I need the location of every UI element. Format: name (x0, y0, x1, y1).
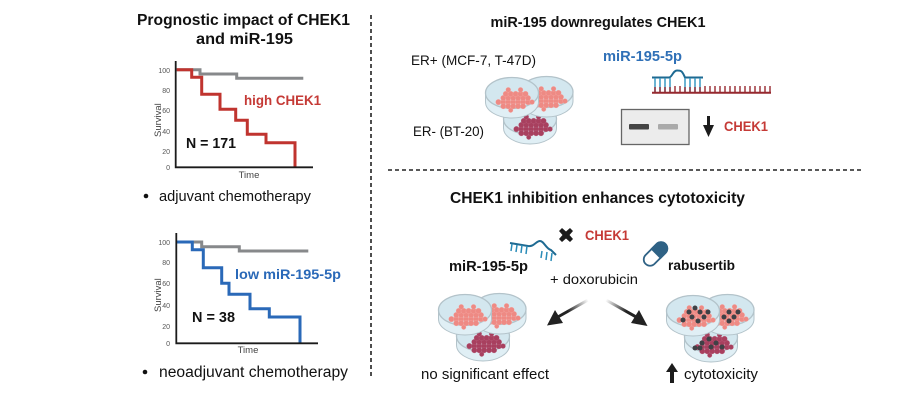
icon: miRNA strand (510, 241, 556, 261)
axis tick labels: 40 (162, 129, 170, 136)
icon: petri dishes (486, 76, 573, 144)
survival chart: low miR-195-5p (153, 233, 341, 356)
label: miR-195-5p: miR-195-5p (603, 49, 682, 65)
divider: horizontal (388, 169, 862, 171)
label: cytotoxicity: cytotoxicity (684, 367, 759, 383)
label: high CHEK1: high CHEK1 (244, 92, 321, 108)
axis tick labels: 100 (158, 240, 170, 247)
grey survival curve (177, 242, 308, 251)
icon: arrow to right (606, 300, 648, 326)
y axis label: Survival (153, 103, 164, 137)
label: miR-195-5p: miR-195-5p (449, 259, 528, 275)
icon: treated petri dishes (666, 294, 754, 362)
axis tick labels: 80 (162, 88, 170, 95)
label: rabusertib: rabusertib (668, 257, 735, 273)
heading: prognostic impact: Prognostic impact of CHEK1 (137, 12, 350, 29)
icon: capsule (641, 238, 671, 269)
red survival curve (177, 70, 295, 167)
label: + doxorubicin: + doxorubicin (550, 271, 638, 287)
axes (176, 61, 313, 167)
axis tick labels: 0 (166, 165, 170, 172)
heading: inhibition: CHEK1 inhibition enhances cytotoxicity (450, 190, 745, 207)
icon: up arrow (666, 363, 678, 383)
panel: miR-195 downregulates CHEK1 (411, 14, 771, 144)
icon: western blot (622, 110, 689, 144)
axis tick labels: 0 (166, 341, 170, 348)
label: ER+: ER+ (MCF-7, T-47D) (411, 52, 536, 68)
icon: cross (559, 228, 573, 242)
axis tick labels: 20 (162, 324, 170, 331)
heading: downregulates: miR-195 downregulates CHEK1 (490, 14, 706, 31)
icon: untreated petri dishes (438, 294, 526, 361)
survival chart: high CHEK1 (153, 61, 321, 181)
y axis label: Survival (153, 278, 164, 312)
label: no significant effect: no significant effect (421, 367, 549, 383)
icon: miRNA bound to mRNA (652, 70, 771, 93)
heading: prognostic impact (137, 12, 350, 48)
axis tick labels: 60 (162, 281, 170, 288)
label: CHEK1: CHEK1 (585, 228, 629, 243)
grey survival curve (177, 70, 303, 78)
label: N = 38: N = 38 (192, 310, 235, 326)
icon: down arrow (703, 116, 714, 137)
x axis label: Time (239, 170, 259, 181)
axis tick labels (158, 240, 170, 348)
axis tick labels: 20 (162, 149, 170, 156)
bullet: neoadjuvant chemotherapy: neoadjuvant chemotherapy (159, 364, 348, 381)
blue survival curve (177, 242, 300, 343)
axis tick labels: 80 (162, 260, 170, 267)
axes (176, 233, 318, 343)
x axis label: Time (238, 345, 258, 356)
axis tick labels: 40 (162, 303, 170, 310)
axis tick labels: 100 (158, 68, 170, 75)
panel: prognostic impact (137, 12, 350, 381)
label: N = 171: N = 171 (186, 136, 236, 152)
heading: prognostic impact: and miR-195 (196, 31, 293, 48)
label: CHEK1: CHEK1 (724, 119, 768, 134)
icon: arrow to left (547, 300, 588, 326)
axis tick labels: 60 (162, 108, 170, 115)
label: low miR-195-5p: low miR-195-5p (235, 266, 341, 282)
bullet: adjuvant chemotherapy: adjuvant chemotherapy (159, 189, 312, 205)
panel: CHEK1 inhibition (421, 190, 759, 383)
label: ER-: ER- (BT-20) (413, 123, 484, 139)
divider: vertical (370, 15, 372, 378)
axis tick labels (158, 68, 170, 172)
